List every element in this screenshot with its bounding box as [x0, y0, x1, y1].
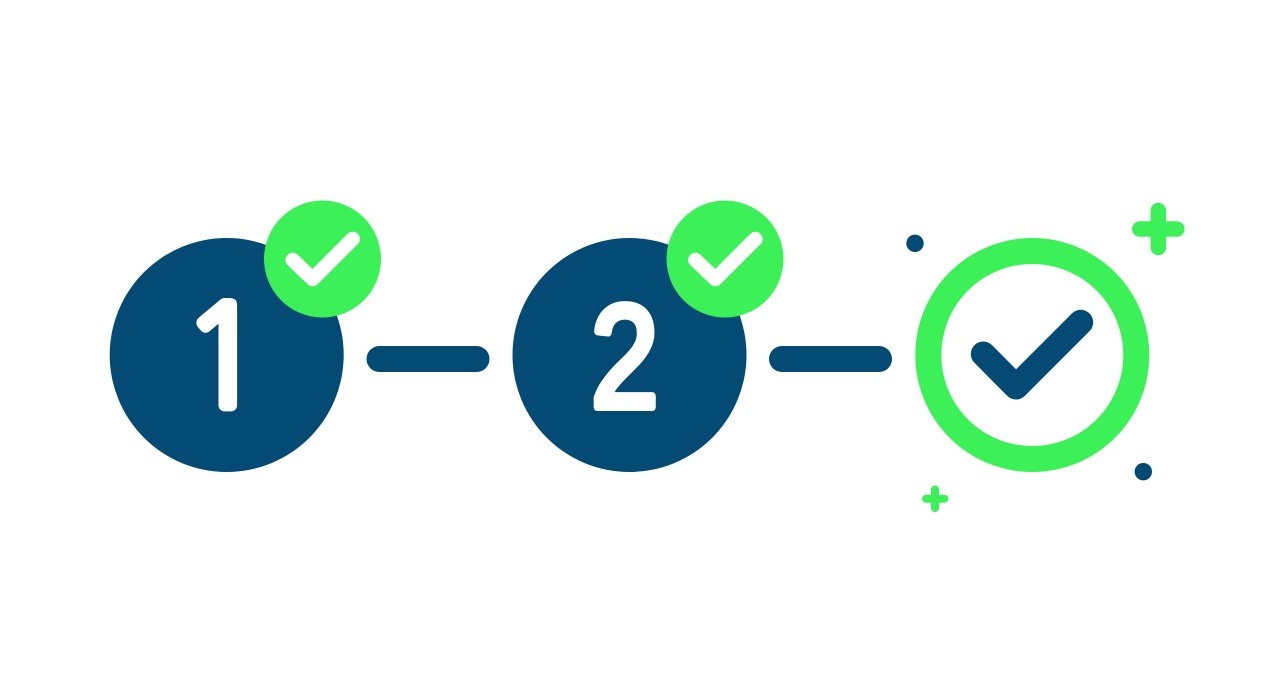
step 1 check badge: [264, 200, 381, 318]
icon: completed check mark: [983, 322, 1081, 387]
step 1 number: 1: [181, 288, 266, 428]
decoration: large plus: [1140, 210, 1177, 248]
connector 2: [769, 346, 892, 372]
decoration: dot top left: [906, 235, 924, 252]
step 2: [512, 200, 784, 472]
step 2 circle: [512, 238, 746, 472]
step 2 check badge: [666, 200, 784, 318]
step 2 number: 2: [591, 276, 659, 438]
connector 1: [366, 346, 490, 372]
step 1 circle: [110, 238, 344, 472]
step 1: [110, 200, 381, 472]
decoration: dot bottom right: [1135, 463, 1152, 480]
completed step: [928, 251, 1136, 459]
decoration: small plus: [926, 490, 944, 508]
completed ring: [928, 251, 1136, 459]
